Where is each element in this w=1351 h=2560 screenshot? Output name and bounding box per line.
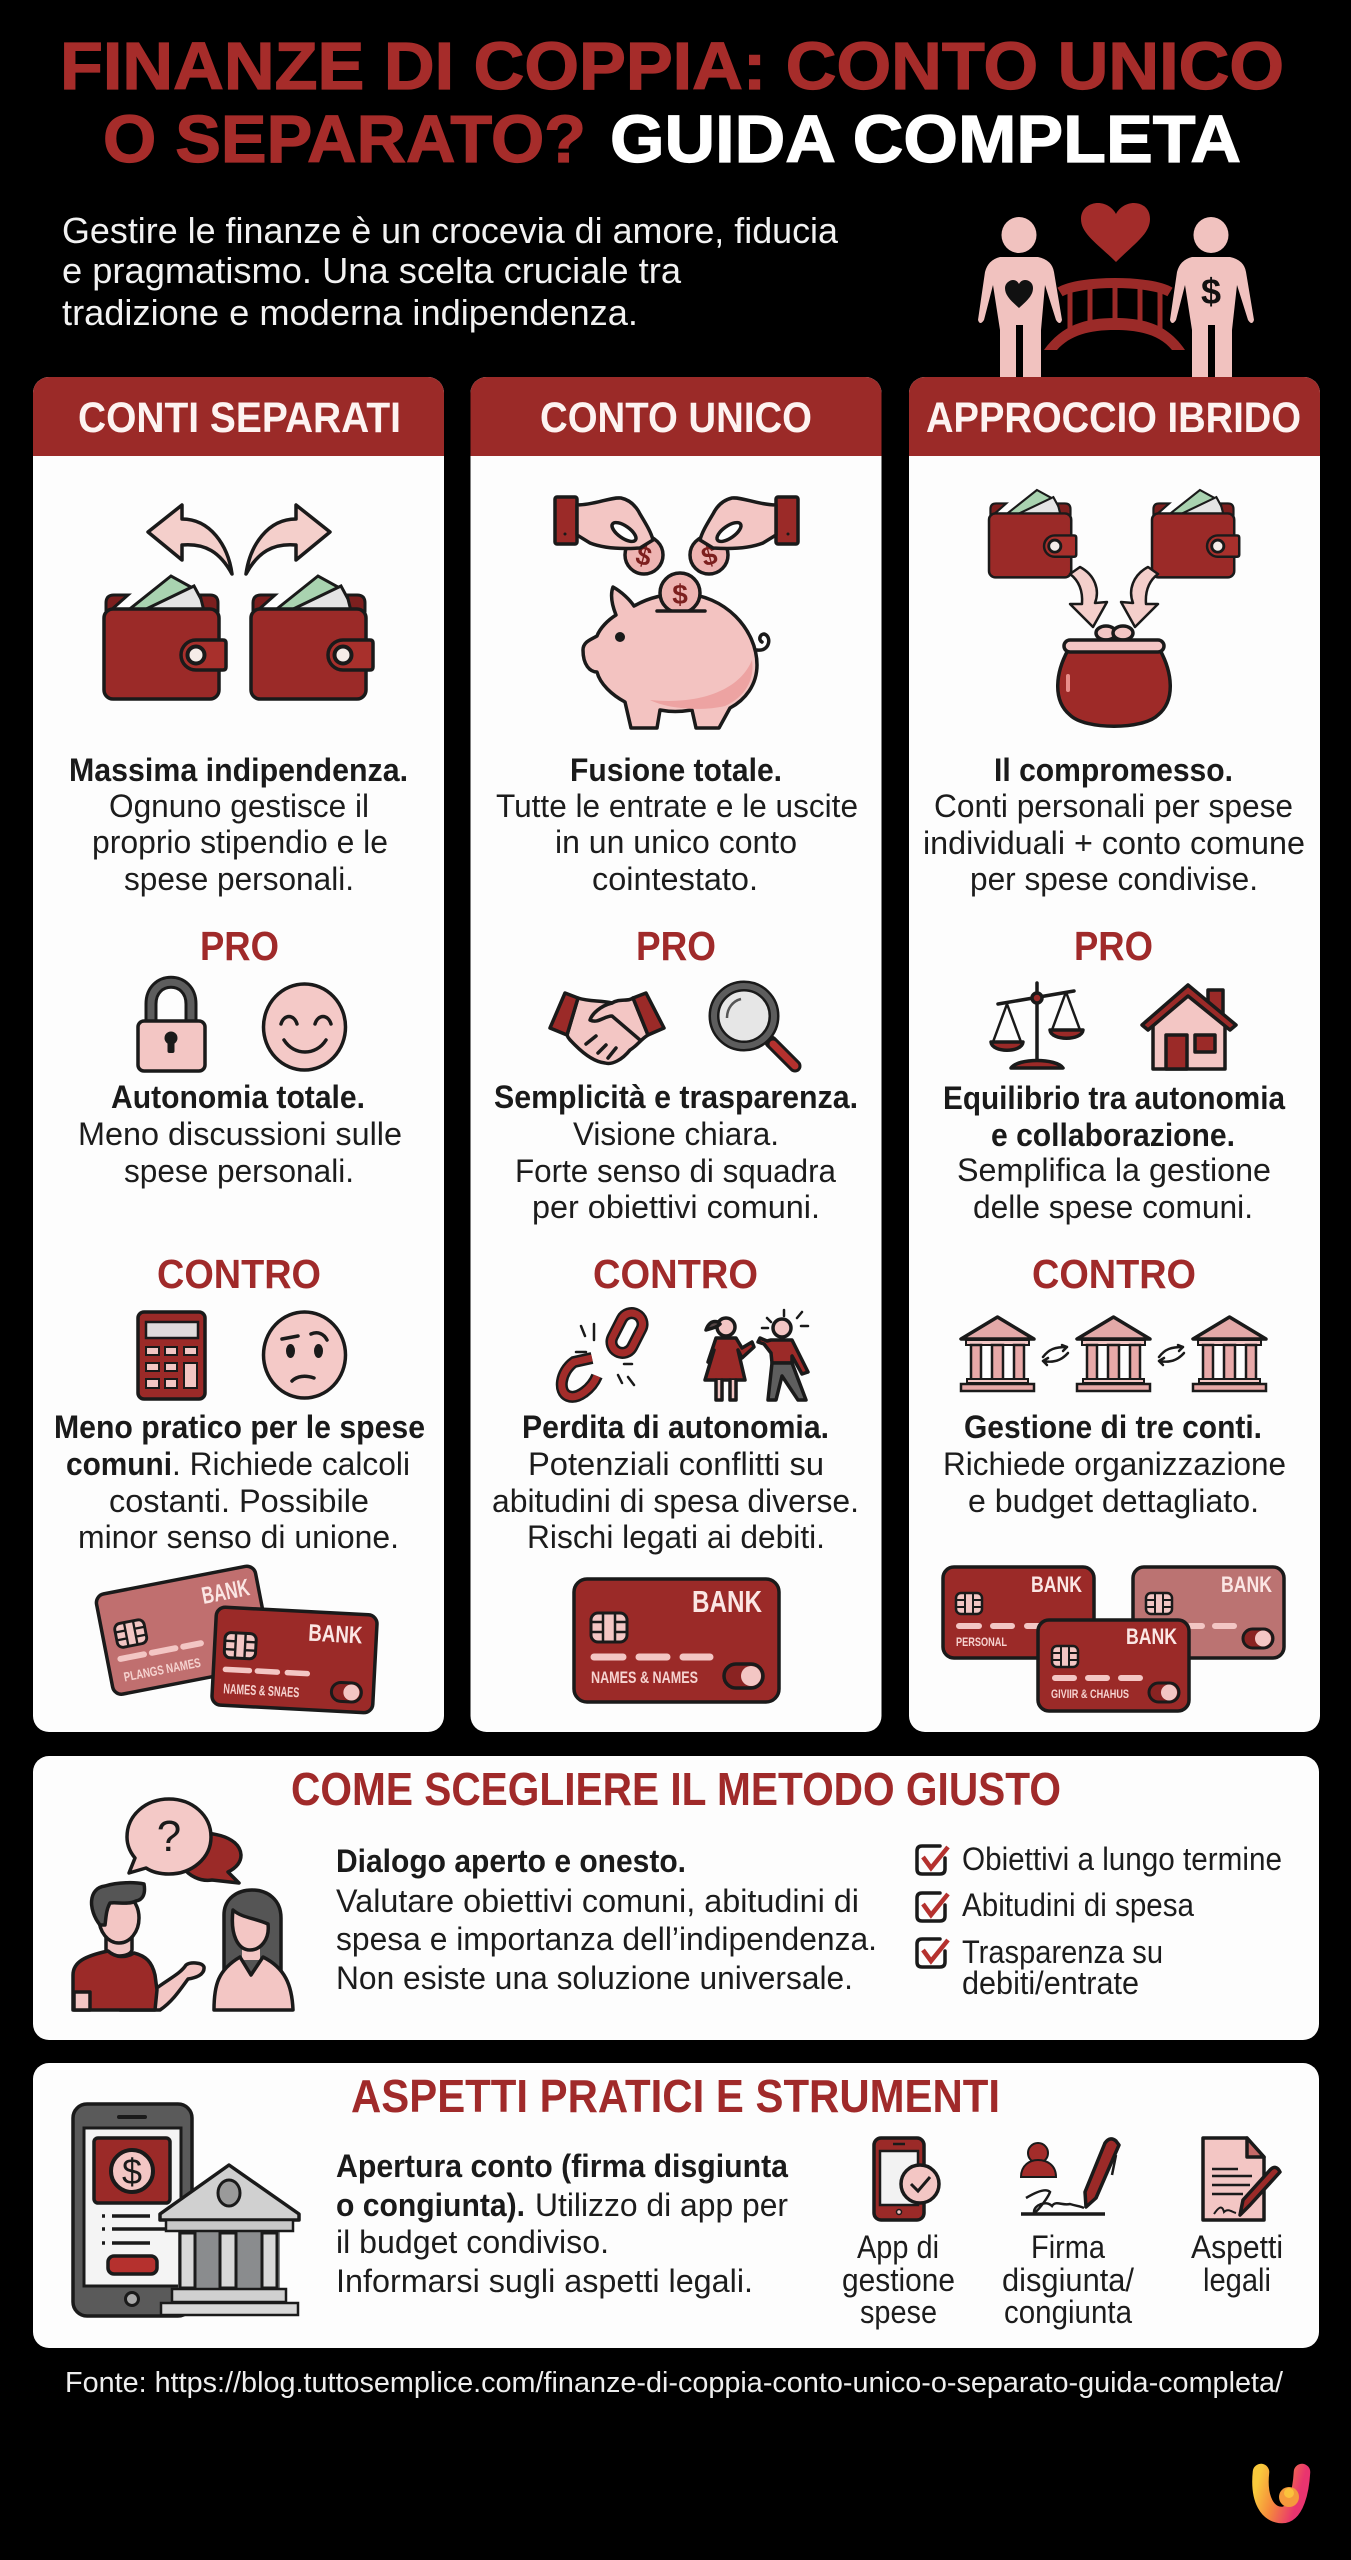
description: Fusione totale. (570, 752, 782, 788)
contro text (492, 1409, 859, 1555)
label: app di gestione spese: spese (860, 2294, 937, 2330)
text: apertura conto (336, 2148, 788, 2299)
pro text: per obiettivi comuni. (532, 1189, 820, 1225)
intro text: tradizione e moderna indipendenza. (62, 292, 638, 333)
text: dialogo aperto: Non esiste una soluzione universale. (336, 1960, 853, 1996)
logo (1260, 2472, 1302, 2515)
icon: couple with heart and bridge: $ (1201, 271, 1221, 312)
pro text: e collaborazione. (991, 1117, 1235, 1153)
icon: bank card: BANK (692, 1584, 762, 1619)
pro text: Equilibrio tra autonomia (943, 1080, 1285, 1116)
icon: two wallets (104, 576, 373, 699)
label: app di gestione spese: App di (857, 2229, 939, 2265)
heading: conti separati: CONTI SEPARATI (78, 394, 401, 442)
heading: conto unico: CONTO UNICO (540, 394, 812, 442)
panel: conti separati (33, 377, 444, 1732)
pro text: Meno discussioni sulle (78, 1116, 402, 1152)
icon: hands dropping coins: $ (698, 540, 720, 572)
heading: contro: CONTRO (1032, 1251, 1196, 1297)
label: firma disgiunta/congiunta: Firma (1031, 2229, 1105, 2265)
description: spese personali. (124, 861, 354, 897)
description: proprio stipendio e le (92, 824, 388, 860)
contro text (943, 1409, 1286, 1519)
pro text: spese personali. (124, 1153, 354, 1189)
label: app di gestione spese: gestione (842, 2262, 955, 2298)
contro text: Richiede organizzazione (943, 1446, 1286, 1482)
icon: bank card (574, 1579, 779, 1702)
pro text: Forte senso di squadra (515, 1153, 836, 1189)
panel: come scegliere il metodo giusto (33, 1756, 1319, 2040)
label: aspetti legali: legali (1203, 2262, 1271, 2298)
icon: three bank cards: BANK (1031, 1572, 1082, 1597)
icon: arguing couple (705, 1310, 808, 1400)
pro text: Autonomia totale. (111, 1079, 365, 1115)
icon: smartphone and bank: $ (122, 2151, 142, 2192)
description: per spese condivise. (970, 861, 1258, 897)
icon: smiling face (264, 984, 346, 1070)
contro text (54, 1409, 425, 1555)
pro text (494, 1079, 858, 1225)
icon: expense app (874, 2138, 939, 2220)
text: apertura conto: il budget condiviso. (336, 2224, 609, 2260)
icon: two bank cards: BANK (199, 1574, 252, 1610)
text: apertura conto: Apertura conto (firma disgiunta (336, 2148, 788, 2184)
icon: magnifying glass (714, 986, 795, 1066)
description: individuali + conto comune (923, 825, 1305, 861)
description: cointestato. (592, 861, 758, 897)
contro text: abitudini di spesa diverse. (492, 1483, 859, 1519)
contro text: Meno pratico per le spese (54, 1409, 425, 1445)
pro text: Visione chiara. (573, 1116, 779, 1152)
heading: ASPETTI PRATICI E STRUMENTI (351, 2070, 1000, 2122)
intro text: Gestire le finanze è un crocevia di amore, fiducia (62, 210, 839, 251)
heading: pro: PRO (636, 923, 716, 969)
heading: pro: PRO (1074, 923, 1153, 969)
label: firma disgiunta/congiunta: congiunta (1004, 2294, 1132, 2330)
icon: piggy bank: $ (672, 579, 688, 610)
icon: piggy bank (583, 573, 769, 728)
icon: hands dropping coins (555, 497, 798, 574)
icon: three bank cards: PERSONAL (956, 1635, 1007, 1649)
panel: aspetti pratici e strumenti (33, 2063, 1319, 2348)
check item: abitudini: Abitudini di spesa (962, 1887, 1194, 1923)
title: GUIDA COMPLETA (610, 102, 1241, 177)
icon: three bank cards: GIVIIR & CHAHUS (1051, 1687, 1129, 1701)
description: Conti personali per spese (934, 788, 1293, 824)
icon: three banks linked by arrows (961, 1317, 1266, 1391)
contro text: comuni (66, 1446, 172, 1482)
icon: couple in dialogue: ? (157, 1812, 181, 1861)
pro text (943, 1080, 1285, 1225)
heading: pro: PRO (200, 923, 279, 969)
text: apertura conto: Utilizzo di app per (535, 2187, 788, 2223)
label: aspetti legali: Aspetti (1191, 2229, 1283, 2265)
text: dialogo aperto: spesa e importanza dell’indipendenza. (336, 1921, 877, 1957)
check item: trasparenza: debiti/entrate (962, 1965, 1139, 2001)
label: firma disgiunta/congiunta: disgiunta/ (1002, 2262, 1134, 2298)
description (496, 752, 858, 897)
description: in un unico conto (555, 824, 797, 860)
icon: three bank cards (943, 1567, 1284, 1711)
icon: two bank cards: PLANGS NAMES (123, 1655, 202, 1684)
text: dialogo aperto: Dialogo aperto e onesto. (336, 1843, 686, 1879)
text: apertura conto: Informarsi sugli aspetti legali. (336, 2263, 753, 2299)
label: firma disgiunta/congiunta (1002, 2229, 1134, 2330)
icon: legal document (1203, 2138, 1280, 2220)
icon: two wallets (989, 490, 1239, 577)
icon: three bank cards: BANK (1126, 1624, 1177, 1649)
icon: bank card: NAMES & NAMES (591, 1668, 698, 1687)
icon: couple with heart and bridge (978, 203, 1254, 377)
icon: balance scale (991, 983, 1083, 1068)
title (60, 29, 1284, 177)
title: O SEPARATO? (103, 102, 586, 177)
label: app di gestione spese (842, 2229, 955, 2330)
icon: worried face (264, 1312, 346, 1398)
contro text: minor senso di unione. (78, 1519, 399, 1555)
description (69, 752, 408, 897)
icon: two bank cards (95, 1565, 377, 1713)
heading: contro: CONTRO (157, 1251, 321, 1297)
contro text: . Richiede calcoli (172, 1446, 410, 1482)
panel: approccio ibrido (909, 377, 1320, 1732)
check item: trasparenza (917, 1934, 1163, 2001)
checklist (917, 1841, 1282, 2001)
text: apertura conto: o congiunta). (336, 2187, 525, 2223)
contro text: costanti. Possibile (109, 1483, 369, 1519)
icon: three bank cards: BANK (1221, 1572, 1272, 1597)
icon: smartphone and bank (73, 2104, 299, 2316)
icon: handshake (550, 993, 664, 1063)
pro text: delle spese comuni. (973, 1189, 1253, 1225)
icon: couple in dialogue (73, 1799, 293, 2010)
icon: arrows converging (1070, 567, 1158, 627)
icon: signature (1021, 2139, 1119, 2214)
heading: approccio ibrido: APPROCCIO IBRIDO (926, 394, 1301, 442)
intro text: e pragmatismo. Una scelta cruciale tra (62, 250, 682, 291)
panel: conto unico (470, 377, 882, 1732)
description: Massima indipendenza. (69, 752, 408, 788)
heading: COME SCEGLIERE IL METODO GIUSTO (291, 1763, 1061, 1815)
contro text: Rischi legati ai debiti. (527, 1519, 825, 1555)
check item: trasparenza: Trasparenza su (962, 1934, 1163, 1970)
icon: calculator (138, 1312, 205, 1399)
pro text: Semplicità e trasparenza. (494, 1079, 858, 1115)
pro text (78, 1079, 402, 1189)
title: FINANZE DI COPPIA: CONTO UNICO (60, 29, 1284, 104)
contro text: Perdita di autonomia. (522, 1409, 829, 1445)
icon: hands dropping coins: $ (633, 540, 655, 572)
contro text: Potenziali conflitti su (528, 1446, 824, 1482)
heading: contro: CONTRO (593, 1251, 758, 1297)
icon: shared purse (1058, 626, 1170, 726)
description: Il compromesso. (994, 752, 1233, 788)
description: Ognuno gestisce il (109, 788, 369, 824)
label: aspetti legali (1191, 2229, 1283, 2298)
icon: broken chain (562, 1309, 646, 1397)
contro text: e budget dettagliato. (968, 1483, 1259, 1519)
text: dialogo aperto: Valutare obiettivi comuni, abitudini di (336, 1883, 859, 1919)
icon: house (1142, 985, 1236, 1069)
icon: arrows diverging (148, 505, 330, 574)
source line: Fonte: https://blog.tuttosemplice.com/finanze-di-coppia-conto-unico-o-separato-guida-completa/ (65, 2367, 1284, 2399)
text: dialogo aperto (336, 1843, 877, 1996)
description (923, 752, 1305, 897)
icon: padlock (138, 982, 205, 1071)
contro text: Gestione di tre conti. (964, 1409, 1262, 1445)
pro text: Semplifica la gestione (957, 1152, 1271, 1188)
description: Tutte le entrate e le uscite (496, 788, 858, 824)
intro text (62, 210, 839, 333)
icon: two bank cards: BANK (308, 1620, 364, 1650)
check item: obiettivi: Obiettivi a lungo termine (962, 1841, 1282, 1877)
icon: two bank cards: NAMES & SNAES (223, 1680, 300, 1700)
